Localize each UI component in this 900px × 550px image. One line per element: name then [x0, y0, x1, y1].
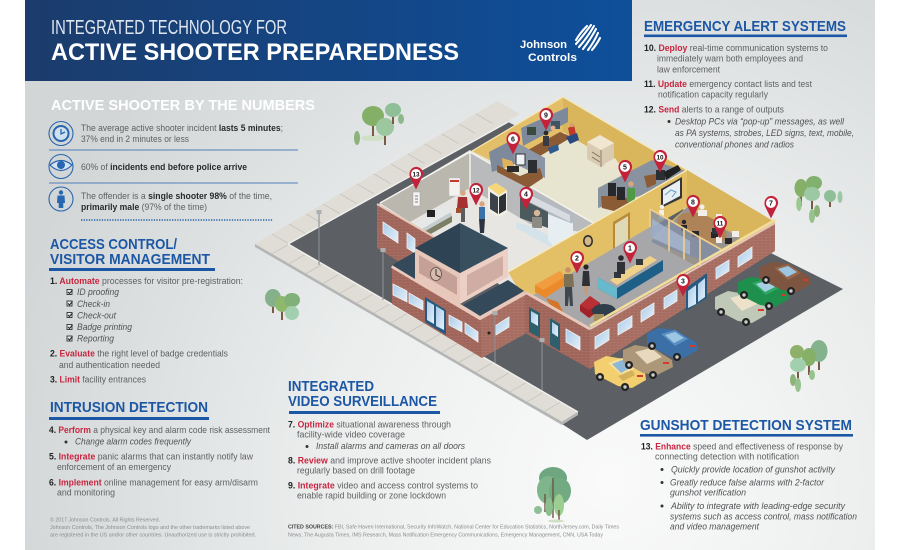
tree cluster: left: [265, 289, 300, 320]
stat: duration: 37% end in 2 minutes or less: [81, 134, 190, 144]
cars: [594, 262, 811, 391]
checklist: Check-in: [77, 299, 110, 309]
item 3: 3. Limit facility entrances: [50, 375, 147, 385]
tree cluster: bottom: [534, 467, 571, 522]
item 2: and authentication needed: [59, 360, 160, 370]
item 7: [288, 419, 466, 451]
item 4: Change alarm codes frequently: [75, 437, 192, 447]
item 5: [49, 452, 254, 472]
item 4: [49, 425, 271, 447]
left room floor: [377, 150, 610, 290]
item 5: 5. Integrate panic alarms that can instantly notify law: [49, 452, 254, 462]
light poles: [316, 210, 544, 390]
cited sources: News, The Augusta Times, IMS Research, Mass Notification Emergency Communications, Emergency Management, CNN, USA Today: [288, 533, 603, 539]
partition wall: [470, 152, 595, 234]
item 13: [641, 441, 844, 462]
tree cluster: right top: [794, 176, 842, 223]
Johnson Controls logo: Johnson: [520, 39, 567, 51]
icon: clock: [49, 122, 73, 146]
left room wall: [380, 152, 470, 222]
tree cluster: right bottom: [790, 340, 828, 392]
cashier station: [413, 205, 452, 240]
pin 1: 1: [628, 246, 632, 252]
pin 13: [409, 167, 423, 190]
item 7: Install alarms and cameras on all doors: [316, 441, 466, 451]
item 11: notification capacity regularly: [658, 90, 769, 100]
header banner: [25, 0, 632, 81]
item 7: 7. Optimize situational awareness through: [288, 419, 451, 429]
item 12: as PA systems, strobes, LED signs, text, mobile,: [675, 128, 854, 138]
heading: emergency alert systems: EMERGENCY ALERT SYSTEMS: [644, 18, 846, 35]
Johnson Controls logo: [520, 25, 600, 64]
item 12: 12. Send alerts to a range of outputs: [644, 105, 785, 115]
upper office walls: [472, 97, 690, 207]
bullet: location: Quickly provide location of gunshot activity: [671, 464, 836, 474]
item 7: facility-wide video coverage: [297, 430, 405, 440]
front entrance block: [392, 265, 525, 358]
sidewalk: [255, 101, 578, 425]
copier: [587, 135, 620, 171]
tower with clock: [392, 223, 524, 316]
car: tan convertible: [623, 345, 673, 379]
bullet: false alarms: [660, 477, 825, 498]
pin 7: 7: [769, 200, 773, 208]
item 6: [49, 478, 258, 498]
pin 3: [676, 274, 690, 296]
heading: video surveillance: VIDEO SURVEILLANCE: [288, 393, 437, 410]
item 11: [644, 79, 813, 100]
item 6: and monitoring: [57, 488, 115, 498]
pin 6: [506, 132, 520, 154]
heading: intrusion detection: INTRUSION DETECTION: [50, 399, 208, 416]
heading: video surveillance: INTEGRATED: [288, 378, 374, 395]
heading: access control: [50, 236, 210, 268]
item 10: [644, 43, 828, 74]
reception floor: [525, 226, 696, 328]
item 10: law enforcement: [657, 64, 721, 74]
pin 9: 9: [544, 112, 548, 120]
cited sources: [288, 525, 619, 539]
heading: video surveillance: [288, 378, 437, 410]
copyright notice: Johnson Controls, The Johnson Controls logo and the other trademarks listed above: [50, 525, 250, 531]
item 1: 1. Automate processes for visitor pre-registration:: [50, 276, 243, 286]
vending fridge: [488, 183, 507, 217]
bullet: false alarms: Greatly reduce false alarms with 2-factor: [670, 477, 825, 487]
item 9: enable rapid building or zone lockdown: [297, 491, 446, 501]
pin 5: [618, 160, 632, 182]
tree cluster: top: [354, 103, 404, 145]
item 9: 9. Integrate video and access control systems to: [288, 480, 478, 490]
pin 10: 10: [656, 154, 664, 161]
clock: [430, 268, 442, 280]
checklist: Badge printing: [77, 322, 132, 332]
item 8: regularly based on drill footage: [297, 466, 415, 476]
copyright notice: © 2017 Johnson Controls. All Rights Reserved.: [50, 517, 160, 524]
stat: offender: [81, 191, 272, 212]
people at reception: [564, 264, 590, 306]
pin 9: [539, 108, 553, 130]
pin 4: 4: [524, 192, 528, 198]
bullet: integration: and video management: [670, 521, 760, 531]
item 4: 4. Perform a physical key and alarm code risk assessment: [49, 425, 271, 435]
item 8: [288, 455, 492, 476]
people at lobby: [456, 190, 485, 233]
item 2: [50, 349, 229, 370]
upper office floor: [470, 97, 690, 226]
title: ACTIVE SHOOTER PREPAREDNESS: [51, 39, 459, 66]
front wall brick: [590, 220, 775, 369]
pin 2: 2: [575, 256, 579, 262]
kiosk display: [516, 187, 573, 250]
car: silver convertible: [715, 291, 766, 326]
item 6: 6. Implement online management for easy arm/disarm: [49, 478, 258, 488]
pin 10: [653, 150, 667, 172]
pin 12: 12: [472, 187, 480, 194]
windows: [595, 247, 752, 349]
checklist: Check-out: [77, 311, 117, 321]
copyright notice: [50, 517, 256, 539]
item 12: [644, 105, 854, 150]
conference room: [650, 170, 775, 267]
item 12: conventional phones and radios: [675, 140, 795, 150]
title: INTEGRATED TECHNOLOGY FOR: [51, 17, 287, 39]
stat: duration: [81, 123, 283, 144]
pin 11: [713, 216, 727, 238]
pin 1: [623, 241, 637, 264]
icon: person: [49, 187, 73, 211]
illustration: isometric building: [255, 97, 843, 440]
item 5: enforcement of an emergency: [57, 462, 172, 472]
item 10: 10. Deploy real-time communication systems to: [644, 43, 828, 53]
item 10: immediately warn both employees and: [657, 54, 803, 64]
stat: duration: The average active shooter incident lasts 5 minutes;: [81, 123, 283, 133]
icon: eye: [49, 154, 73, 178]
reception desk: [597, 255, 663, 299]
office area: workstation 6: [489, 140, 545, 188]
panel: active shooter by the numbers: [49, 97, 315, 220]
pin 11: 11: [717, 220, 724, 227]
car: green: [738, 277, 789, 310]
car: yellow: [594, 356, 646, 391]
bullet: false alarms: gunshot verification: [670, 488, 746, 498]
pin 2: [570, 251, 584, 274]
bullet: integration: [660, 501, 857, 531]
item 8: 8. Review and improve active shooter incident plans: [288, 455, 492, 465]
panel: integrated video surveillance: [288, 378, 492, 501]
item 12: Desktop PCs via “pop-up” messages, as well: [675, 116, 845, 126]
copyright notice: are registered in the US and/or other countries. Unauthorized use is strictly prohibited.: [50, 533, 256, 539]
side wall brick: [525, 292, 590, 369]
Johnson Controls logo: Controls: [528, 52, 577, 64]
item 13: 13. Enhance speed and effectiveness of response by: [641, 441, 844, 451]
heading: access control: ACCESS CONTROL/: [50, 236, 178, 253]
poster: [413, 178, 460, 206]
sofa and lounge: [535, 271, 616, 321]
workstations 5 and 10: [598, 160, 688, 213]
pin 4: [519, 187, 533, 210]
reception wall: [508, 170, 687, 300]
checklist: ID proofing: [77, 287, 119, 297]
wall monitor: [661, 177, 682, 208]
panel: intrusion detection: [49, 399, 271, 498]
title: [51, 17, 459, 66]
heading: access control: VISITOR MANAGEMENT: [50, 251, 210, 268]
panel: access control: [49, 236, 243, 385]
checklist: Reporting: [77, 334, 114, 344]
left upper brick wall: [377, 204, 436, 285]
pin 7: [764, 196, 778, 218]
pin 12: [469, 183, 483, 206]
panel: gunshot detection system: [640, 417, 857, 531]
stat: police: 60% of incidents end before police arrive: [81, 162, 247, 172]
pin 6: 6: [511, 136, 515, 144]
pin 8: [686, 195, 700, 218]
pin 5: 5: [623, 164, 627, 172]
parking lot: [288, 122, 843, 440]
stat: offender: The offender is a single shooter 98% of the time,: [81, 191, 272, 201]
checklist: [67, 287, 132, 344]
item 9: [288, 480, 478, 501]
pin 3: 3: [681, 278, 685, 286]
office area: workstation 9: [521, 107, 579, 156]
car: brown: [760, 262, 811, 295]
car: blue: [647, 328, 698, 361]
glass partition: [650, 209, 722, 267]
item 2: 2. Evaluate the right level of badge credentials: [50, 349, 229, 359]
item 11: 11. Update emergency contact lists and test: [644, 79, 813, 89]
bullet: integration: Ability to integrate with leading-edge security: [670, 501, 846, 511]
location pins: [409, 108, 778, 296]
bullet: integration: systems such as access control, mass notification: [670, 511, 857, 521]
pin 13: 13: [412, 171, 420, 178]
item 13: connecting detection with notification: [655, 452, 799, 462]
heading: by the numbers: ACTIVE SHOOTER BY THE NUMBERS: [51, 97, 315, 114]
panel: emergency alert systems: [644, 18, 854, 150]
pin 8: 8: [691, 200, 695, 206]
heading: gunshot detection: GUNSHOT DETECTION SYSTEM: [640, 417, 852, 434]
stat: offender: primarily male (97% of the time): [81, 202, 207, 212]
trees: [265, 103, 842, 522]
cited sources: CITED SOURCES: FBI, Safe Haven International, Security InfoWatch, National Center for Education Statistics, NorthJersey.com, Daily Times: [288, 525, 619, 531]
entrance door: [686, 273, 707, 311]
